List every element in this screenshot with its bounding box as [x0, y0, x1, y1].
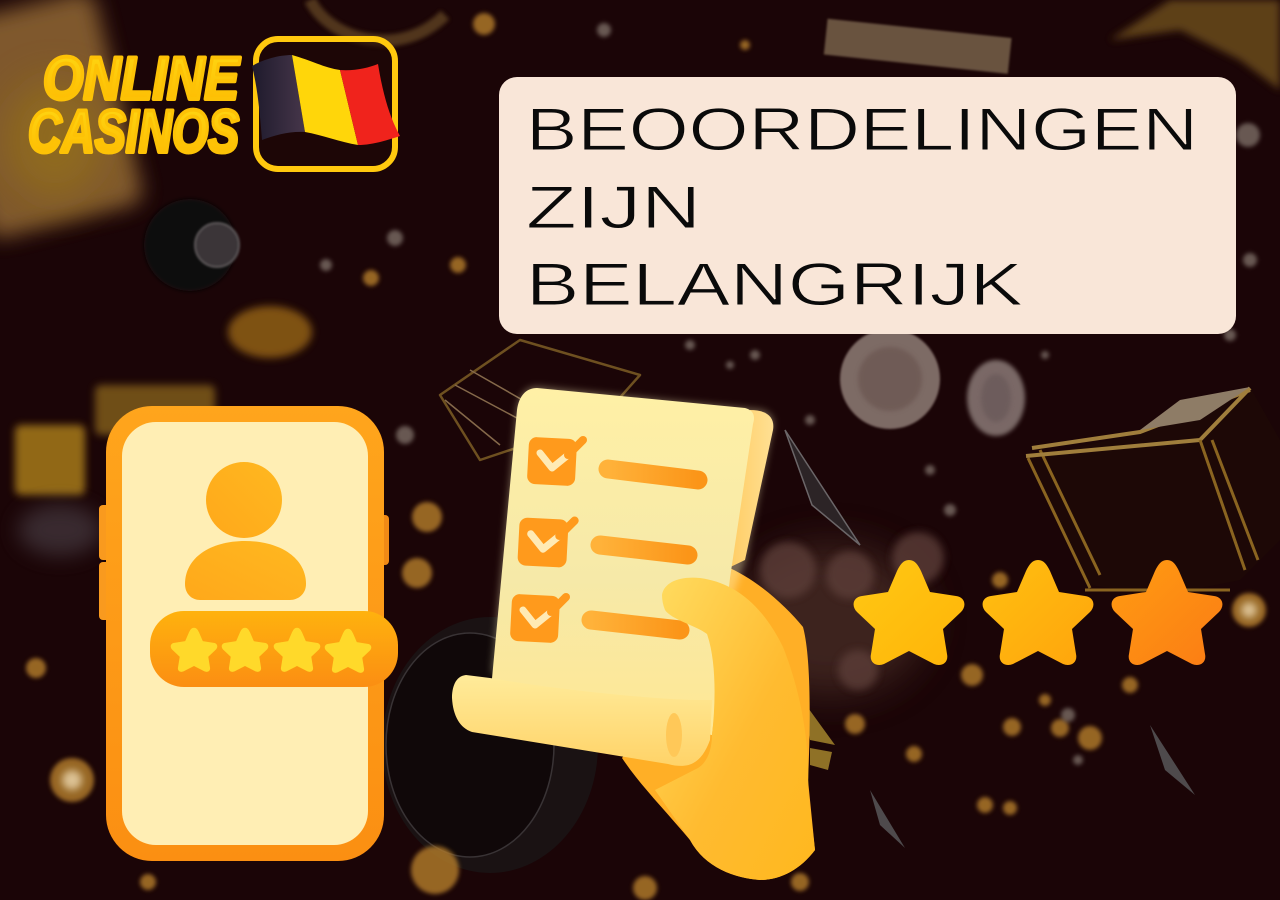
icon: smartphone with user rating	[99, 406, 398, 861]
paper glow	[492, 387, 773, 700]
logo: online casinos	[28, 39, 400, 169]
hand back finger	[622, 566, 815, 880]
checklist items	[510, 437, 698, 643]
decorative dice	[440, 340, 1280, 596]
hand thumb and palm	[655, 578, 815, 880]
icon: belgian flag	[252, 39, 400, 169]
title text: BEOORDELINGEN	[526, 96, 1198, 163]
title text: BELANGRIJK	[526, 251, 1023, 318]
icon: user	[185, 462, 306, 600]
title panel	[499, 77, 1236, 334]
logo text	[28, 45, 241, 165]
logo text: CASINOS	[28, 98, 239, 165]
title text	[526, 96, 1198, 318]
rating bar with four stars	[150, 611, 398, 687]
logo text: ONLINE	[43, 45, 241, 112]
three large stars	[854, 560, 1222, 665]
paper scroll	[452, 388, 773, 766]
decorative bokeh, muted	[760, 532, 944, 690]
icon: hand holding checklist	[452, 387, 815, 880]
decorative chips	[382, 430, 1195, 873]
title text: ZIJN	[526, 174, 701, 241]
